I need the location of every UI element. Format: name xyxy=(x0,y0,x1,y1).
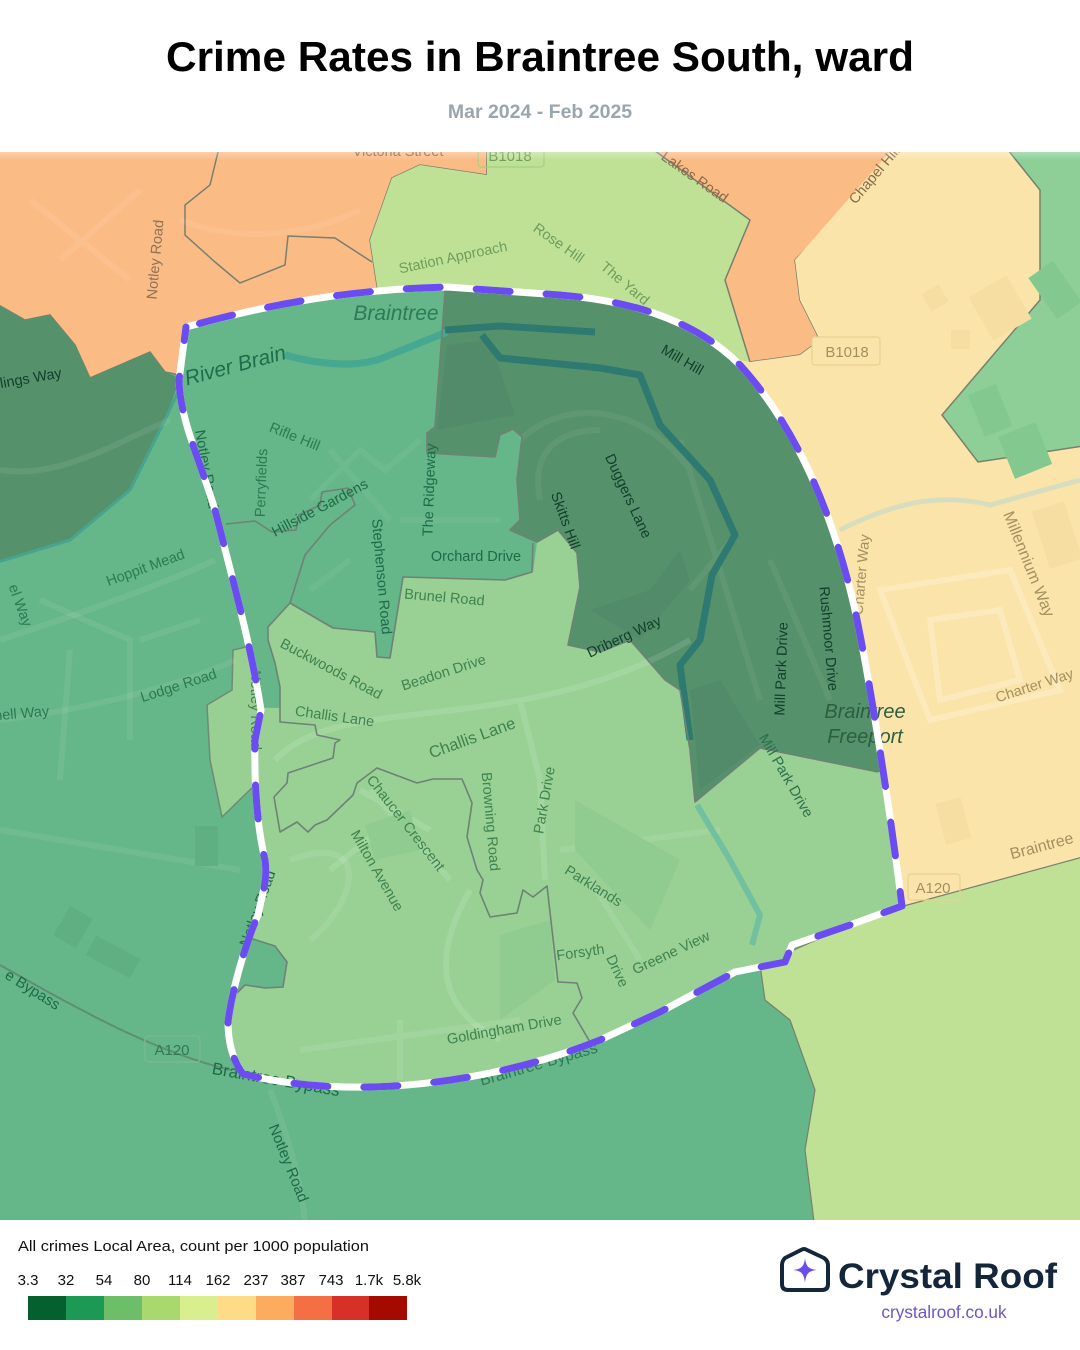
website: crystalroof.co.uk xyxy=(881,1302,1007,1322)
road labels: Skitts Hill xyxy=(547,490,582,551)
place labels xyxy=(182,302,906,748)
road labels: Notley Road xyxy=(145,219,167,300)
road labels: Lodge Road xyxy=(139,666,219,706)
top soft fade xyxy=(0,152,1080,158)
ward internal boundaries xyxy=(226,293,878,1042)
road labels: Braintree Bypass xyxy=(478,1040,600,1090)
place labels: Braintree xyxy=(353,302,439,325)
area: orange north-west xyxy=(0,140,487,378)
road labels: Parklands xyxy=(562,863,625,910)
legend title: All crimes Local Area, count per 1000 population xyxy=(18,1238,369,1255)
road labels xyxy=(0,143,1076,1205)
area: lime north xyxy=(370,140,752,365)
legend colour scale xyxy=(28,1296,407,1320)
dark ward tone patches xyxy=(437,340,760,790)
road shields: A120 xyxy=(154,1042,190,1059)
legend tick labels: 54 xyxy=(96,1272,112,1289)
road labels: Browning Road xyxy=(478,772,502,872)
road labels: Chaucer Crescent xyxy=(363,773,447,875)
legend tick labels: 1.7k xyxy=(355,1272,384,1289)
road labels: Mill Hill xyxy=(658,342,706,379)
road labels: Challis Lane xyxy=(427,714,518,762)
road labels: Rose Hill xyxy=(530,221,587,267)
road labels: Orchard Drive xyxy=(431,549,521,565)
road labels: Notley Road xyxy=(191,429,221,510)
legend tick labels: 5.8k xyxy=(393,1272,422,1289)
mid green footprints south-west xyxy=(195,860,218,866)
road labels: Goldingham Drive xyxy=(446,1012,563,1048)
legend xyxy=(18,1238,422,1320)
area: green north-east xyxy=(942,140,1080,462)
road labels: el Way xyxy=(5,582,35,630)
icon: house with star xyxy=(782,1249,828,1290)
road labels: Beadon Drive xyxy=(400,652,488,694)
road labels: Milton Avenue xyxy=(347,828,406,914)
road labels: Park Drive xyxy=(531,766,559,835)
date range subtitle: Mar 2024 - Feb 2025 xyxy=(448,101,632,123)
ward: mid green north-west part xyxy=(170,280,537,708)
road labels: Stephenson Road xyxy=(368,518,394,635)
ward: dark green north-east part xyxy=(427,280,910,802)
road labels: Driberg Way xyxy=(585,613,665,662)
road labels: The Yard xyxy=(597,259,652,309)
road labels: Chapel Hill xyxy=(846,143,904,207)
area: orange north-east xyxy=(656,152,890,362)
road labels: e Bypass xyxy=(2,967,63,1014)
road labels: Challis Lane xyxy=(294,704,375,731)
area: lime south-east xyxy=(760,855,1080,1230)
road labels: Braintree Bypass xyxy=(211,1059,341,1100)
road labels: Notley Road xyxy=(237,868,279,949)
teal edge of dark area xyxy=(0,392,178,563)
bypass road line xyxy=(0,965,230,1070)
legend tick labels: 743 xyxy=(318,1272,344,1289)
legend tick labels: 237 xyxy=(243,1272,269,1289)
title: Crime Rates in Braintree South, ward xyxy=(166,33,914,80)
legend tick labels: 387 xyxy=(280,1272,306,1289)
faint roads inside ward xyxy=(275,413,830,1080)
logo xyxy=(782,1249,1057,1322)
road labels: Buckwoods Road xyxy=(277,636,384,703)
area: dark green north-west xyxy=(0,303,180,563)
road shields: B1018 xyxy=(488,148,532,165)
road labels: Rifle Hill xyxy=(267,420,322,455)
ward boundary xyxy=(179,287,902,1087)
legend tick labels: 32 xyxy=(58,1272,74,1289)
road labels: Charter Way xyxy=(851,533,874,616)
road labels: Notley Road xyxy=(247,670,263,750)
orange inner boundary xyxy=(185,152,372,283)
road labels: Forsyth xyxy=(555,942,605,964)
green area footprints xyxy=(968,261,1080,479)
road labels: Station Approach xyxy=(397,239,509,277)
road labels: Rushmoor Drive xyxy=(815,586,841,692)
legend tick labels: 80 xyxy=(134,1272,150,1289)
road shields xyxy=(145,142,960,1062)
road labels: The Ridgeway xyxy=(420,443,440,536)
river in ward xyxy=(285,326,760,945)
road labels: Mill Park Drive xyxy=(755,732,816,820)
road labels: Millennium Way xyxy=(999,509,1057,620)
road labels: Perryfields xyxy=(253,448,271,517)
road labels: Charter Way xyxy=(994,666,1076,706)
road labels: Victoria Street xyxy=(353,144,443,160)
legend tick labels: 162 xyxy=(205,1272,231,1289)
road labels: Greene View xyxy=(630,928,713,978)
road labels: Mill Park Drive xyxy=(772,622,792,716)
legend tick labels: 114 xyxy=(168,1272,192,1289)
ward base fill xyxy=(224,290,898,1084)
area: yellow east xyxy=(740,140,1080,907)
road labels: Drive xyxy=(602,953,631,990)
legend tick labels: 3.3 xyxy=(18,1272,38,1289)
road labels: Braintree xyxy=(1008,830,1075,863)
road labels: Notley Road xyxy=(265,1122,312,1205)
legend tick labels xyxy=(18,1272,422,1289)
place labels: Braintree xyxy=(824,701,906,723)
road labels: Lakes Road xyxy=(658,149,731,206)
place labels: Freeport xyxy=(827,726,904,748)
road labels: Duggers Lane xyxy=(601,452,654,541)
road labels: Brunel Road xyxy=(404,587,485,609)
place labels: River Brain xyxy=(182,341,288,390)
faint roads outside ward xyxy=(0,190,1080,1220)
light ward tone patches xyxy=(365,800,680,1020)
road labels: Hillside Gardens xyxy=(269,476,371,541)
ward: mid green patch south-west xyxy=(232,938,287,992)
road labels: Hoppit Mead xyxy=(104,547,187,590)
yellow area footprints xyxy=(921,275,1080,845)
road shields: B1018 xyxy=(825,344,869,361)
road shields: A120 xyxy=(915,880,951,897)
area: light green patch west of ward xyxy=(206,646,258,818)
brand name: Crystal Roof xyxy=(838,1256,1057,1296)
